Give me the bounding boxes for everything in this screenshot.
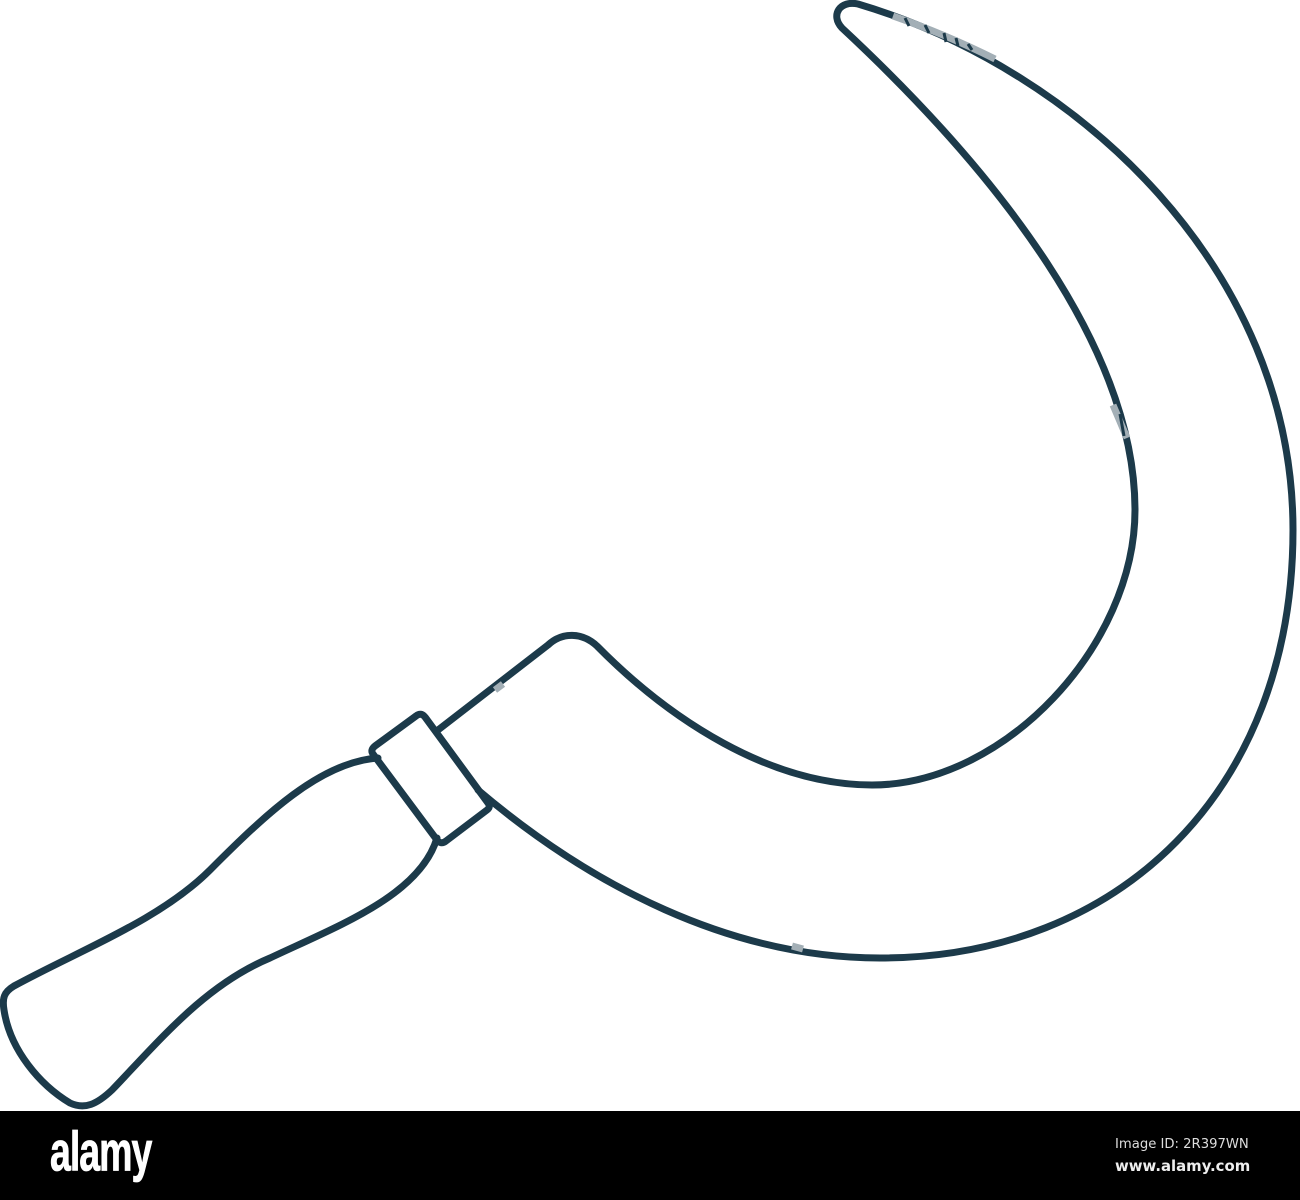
- sickle handle: [3, 758, 437, 1106]
- logo: alamy: alamy: [50, 1121, 153, 1183]
- watermark: top of blade: [893, 16, 995, 59]
- footer bar: [0, 1111, 1300, 1200]
- watermark letter bits: [905, 18, 1124, 436]
- watermark: back of blade neck: [495, 684, 503, 690]
- watermark marks on sickle outline: [495, 16, 1127, 949]
- watermark: lower blade: [792, 946, 803, 949]
- image id: Image ID: 2R397WN: [1115, 1137, 1249, 1152]
- watermark: inner blade: [1113, 405, 1127, 438]
- sickle blade: [438, 3, 1293, 958]
- sickle collar: [372, 714, 489, 843]
- dark gaps in top watermark: [905, 18, 1124, 436]
- website: www.alamy.com: [1115, 1157, 1250, 1175]
